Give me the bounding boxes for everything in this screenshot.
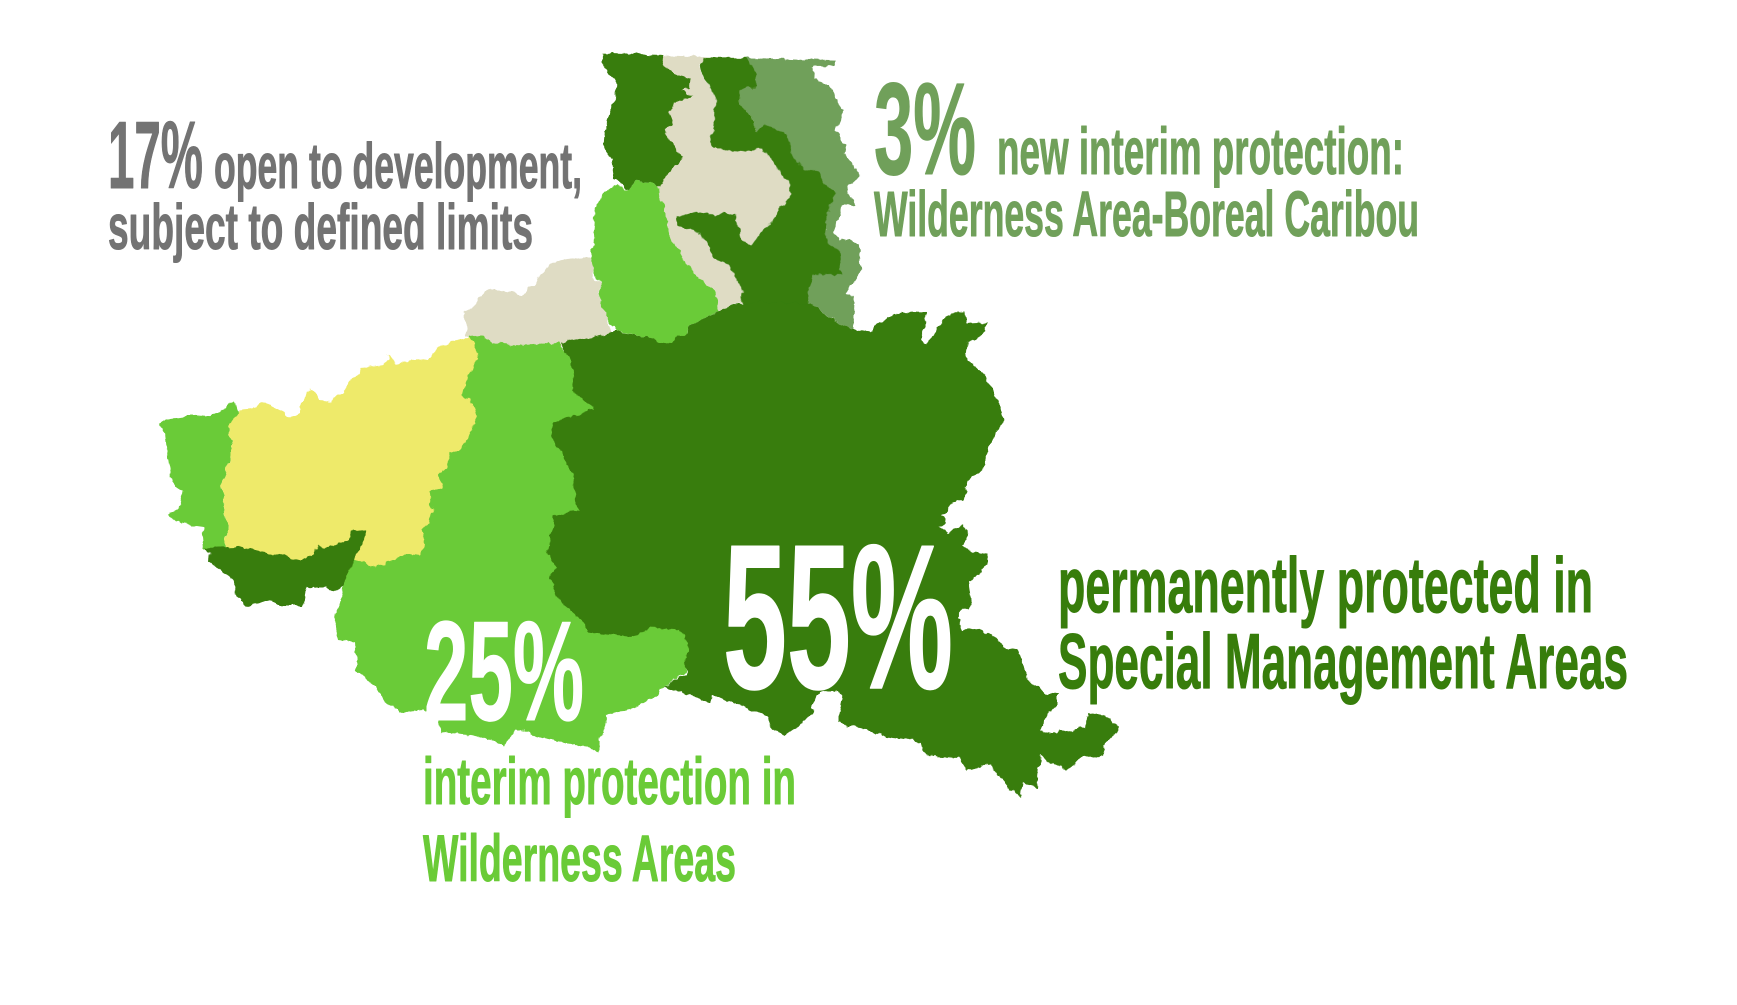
map region: beige west, open to development [465,257,612,347]
map region: special management area, north central [677,58,843,305]
callout: 3% new interim protection [874,55,1419,250]
map region: special management area, southwest [206,528,366,606]
map region: special management area, large central and southeast [547,302,1120,798]
callout: permanently protected in Special Management Areas [1058,541,1628,705]
figure: 55%: 55% [723,502,953,732]
label: interim protection in: interim protection in [423,744,796,818]
label: subject to defined limits: subject to defined limits [108,191,533,263]
map region: new interim protection, boreal caribou [739,58,862,328]
callout: interim protection in Wilderness Areas [423,744,796,895]
figure: 25%: 25% [424,592,584,751]
map region: wilderness area, central north [592,180,720,343]
map region: special management area, northwest [603,53,693,190]
map region: beige north, open to development [643,55,792,310]
label: new interim protection: new interim protection: [997,114,1404,188]
callout: 17% open to development: 17% [108,102,203,209]
map of land designations [158,53,1120,798]
map region: yellow, west [221,337,478,567]
figure: 3%: 3% [874,55,976,202]
label: Wilderness Areas: Wilderness Areas [423,821,736,895]
map region: wilderness area, central and south [335,335,695,752]
map region: wilderness area, far west [158,402,238,550]
callout: 17% open to development [108,102,582,263]
label: open to development: open to development, [214,130,582,202]
